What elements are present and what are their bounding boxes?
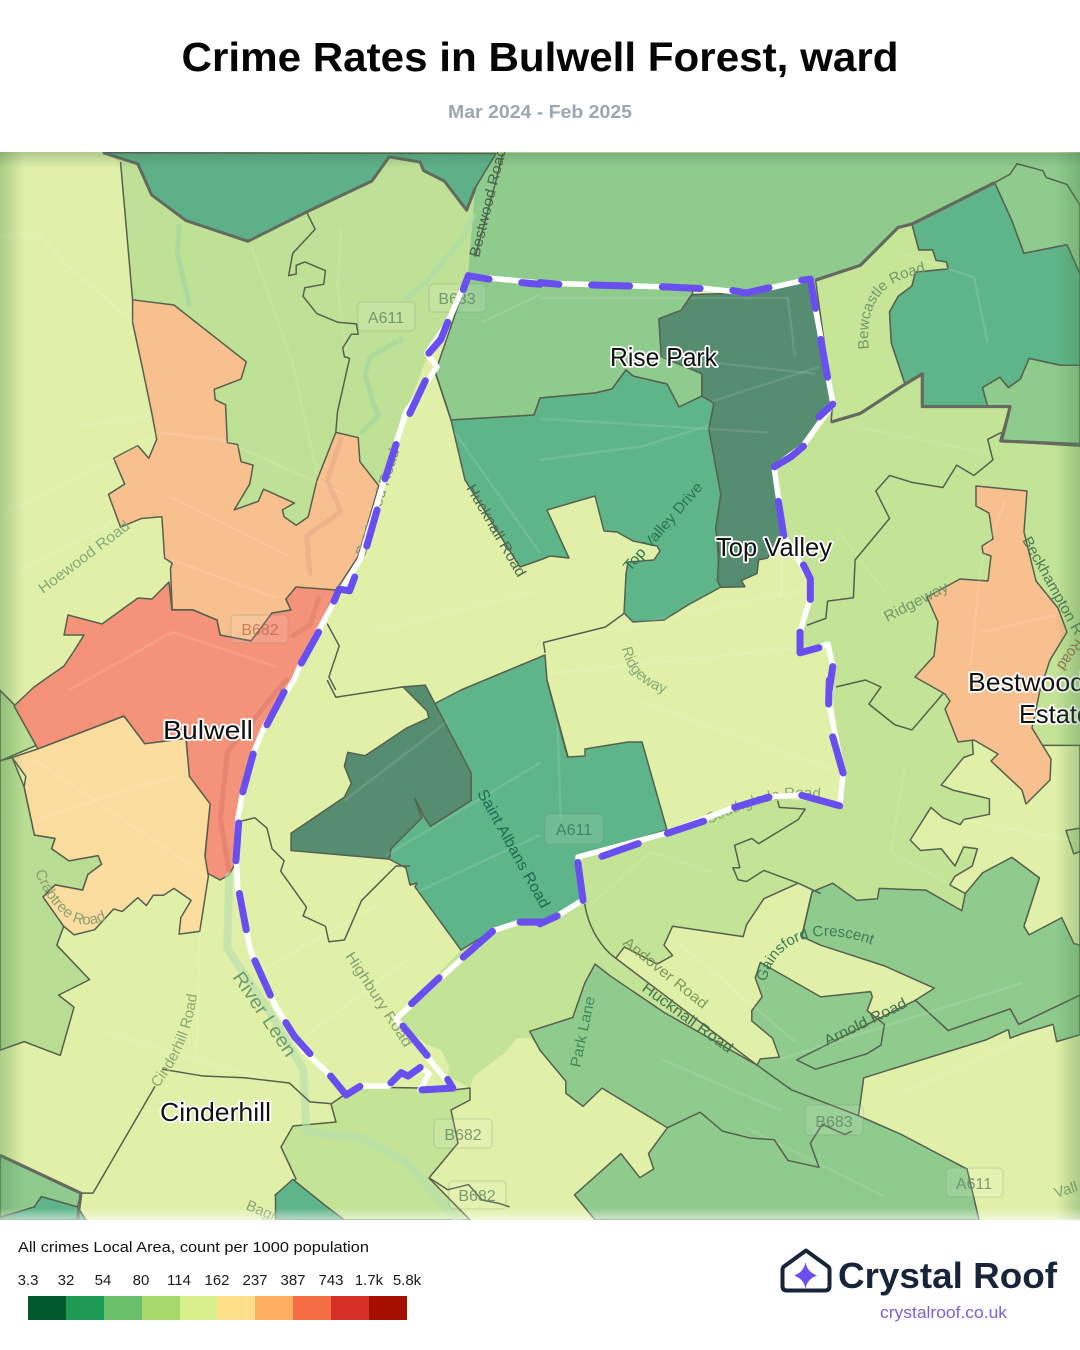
area: eastern and southern medium band <box>396 374 1080 1088</box>
area: Rise Park light green <box>436 277 702 420</box>
area: pale orange Bulwell south <box>12 716 210 935</box>
boundary: white base line <box>236 276 843 1095</box>
legend tick labels: 1.7k <box>355 1272 384 1289</box>
area: Gainsford Crescent green <box>802 857 1080 1031</box>
icon: house with star <box>782 1250 830 1290</box>
legend tick labels: 237 <box>242 1272 268 1289</box>
place labels: Rise Park <box>610 342 718 372</box>
boundary: purple dashes south-east <box>540 680 843 924</box>
road name labels: Southglade Road <box>706 788 820 823</box>
road name labels: Bestwood Road <box>353 446 403 558</box>
area: north-east light green <box>995 164 1080 274</box>
road name labels: Hucknall Road <box>463 482 529 580</box>
road name labels: Andover Road <box>619 934 711 1013</box>
road number signs: B682 <box>444 1127 482 1144</box>
road number signs: B682 <box>458 1188 496 1205</box>
road name labels: Top Valley Drive <box>620 479 706 575</box>
road name labels: Gainsford Crescent <box>757 926 874 980</box>
area: north-west medium band <box>112 157 474 524</box>
area: north forest band <box>468 153 1080 296</box>
place labels: Bulwell <box>163 715 253 745</box>
area: Park Lane green <box>530 962 1080 1220</box>
road name labels: Ridgeway <box>622 646 668 694</box>
place labels: Top Valley <box>716 532 832 562</box>
road name labels: Arnold Road <box>821 995 910 1050</box>
legend tick labels: 54 <box>95 1272 111 1289</box>
road number signs: A611 <box>368 310 404 327</box>
road name labels: Crabtree Road <box>36 870 106 925</box>
logo wordmark: Crystal Roof <box>838 1255 1058 1296</box>
area: Bewcastle Road <box>816 224 948 422</box>
road name labels: Saint Albans Road <box>474 787 553 911</box>
area: Saint Albans green <box>389 655 667 950</box>
road name labels: Hoewood Road <box>35 517 133 597</box>
legend tick labels: 5.8k <box>393 1272 422 1289</box>
area: Saint Albans dark green <box>291 685 471 859</box>
ward boundary: dashed white and purple outline of Bulwell Forest <box>236 276 843 1095</box>
area: yellow pocket near Bestwood Estate <box>910 739 1080 949</box>
road name labels: Bestwood Road <box>466 146 510 259</box>
legend colour scale <box>28 1296 407 1320</box>
legend tick labels: 80 <box>133 1272 149 1289</box>
road name labels: Bagnall <box>243 1197 296 1232</box>
legend tick labels <box>18 1272 422 1289</box>
place labels: Bestwood <box>968 667 1080 697</box>
area: Top Valley Drive green <box>451 370 721 622</box>
inner boundary lines <box>0 153 1080 1220</box>
place labels: Cinderhill <box>160 1097 271 1127</box>
road name labels: Bewcastle Road <box>858 262 925 349</box>
boundary: purple dashes north-east <box>540 279 833 690</box>
road name labels: Vall <box>1052 1178 1080 1202</box>
area: Bulwell dark green north <box>103 153 496 241</box>
road name labels: Highbury Road <box>342 949 416 1050</box>
road number signs: A611 <box>556 822 592 839</box>
streets <box>0 229 1080 1197</box>
area: south-west green <box>0 1155 344 1220</box>
area: west medium <box>0 690 102 1055</box>
legend title: All crimes Local Area, count per 1000 population <box>18 1239 369 1256</box>
legend tick labels: 3.3 <box>18 1272 38 1289</box>
map edge shading <box>0 152 1080 1220</box>
area: north-east green <box>890 183 1080 407</box>
area: east light green <box>983 358 1080 446</box>
title: Crime Rates in Bulwell Forest, ward <box>182 34 898 80</box>
legend tick labels: 743 <box>318 1272 344 1289</box>
legend <box>18 1239 422 1320</box>
road number signs: B682 <box>241 622 279 639</box>
road name labels: Ridgeway <box>881 578 952 626</box>
legend tick labels: 387 <box>280 1272 306 1289</box>
road name labels: Park Lane <box>567 995 599 1069</box>
subtitle: date range: Mar 2024 - Feb 2025 <box>448 102 632 122</box>
road name labels: Hucknall Road <box>639 979 736 1057</box>
road name labels <box>36 152 1080 1220</box>
road number signs: B633 <box>438 291 476 308</box>
legend tick labels: 32 <box>58 1272 74 1289</box>
area: Top Valley dark green <box>659 279 833 587</box>
road number signs: A611 <box>956 1176 992 1193</box>
area: Bestwood Estate orange <box>915 486 1067 804</box>
place labels <box>160 342 1080 1127</box>
rivers <box>177 215 474 1220</box>
logo: Crystal Roof <box>782 1250 1058 1322</box>
area: salmon Bulwell centre <box>14 582 336 880</box>
boundary: purple dashes south-west <box>236 692 540 1095</box>
road number signs: B683 <box>815 1114 853 1131</box>
area: south of ward medium <box>275 1087 470 1220</box>
road number signs <box>231 284 1003 1209</box>
legend tick labels: 114 <box>167 1272 191 1289</box>
area: orange Bulwell north <box>108 300 379 641</box>
road name labels: Cinderhill Road <box>152 994 197 1086</box>
legend tick labels: 162 <box>204 1272 230 1289</box>
road name labels: River Leen <box>228 968 300 1061</box>
boundary: purple dashes north-west <box>301 276 540 663</box>
website url: crystalroof.co.uk <box>880 1304 1008 1322</box>
